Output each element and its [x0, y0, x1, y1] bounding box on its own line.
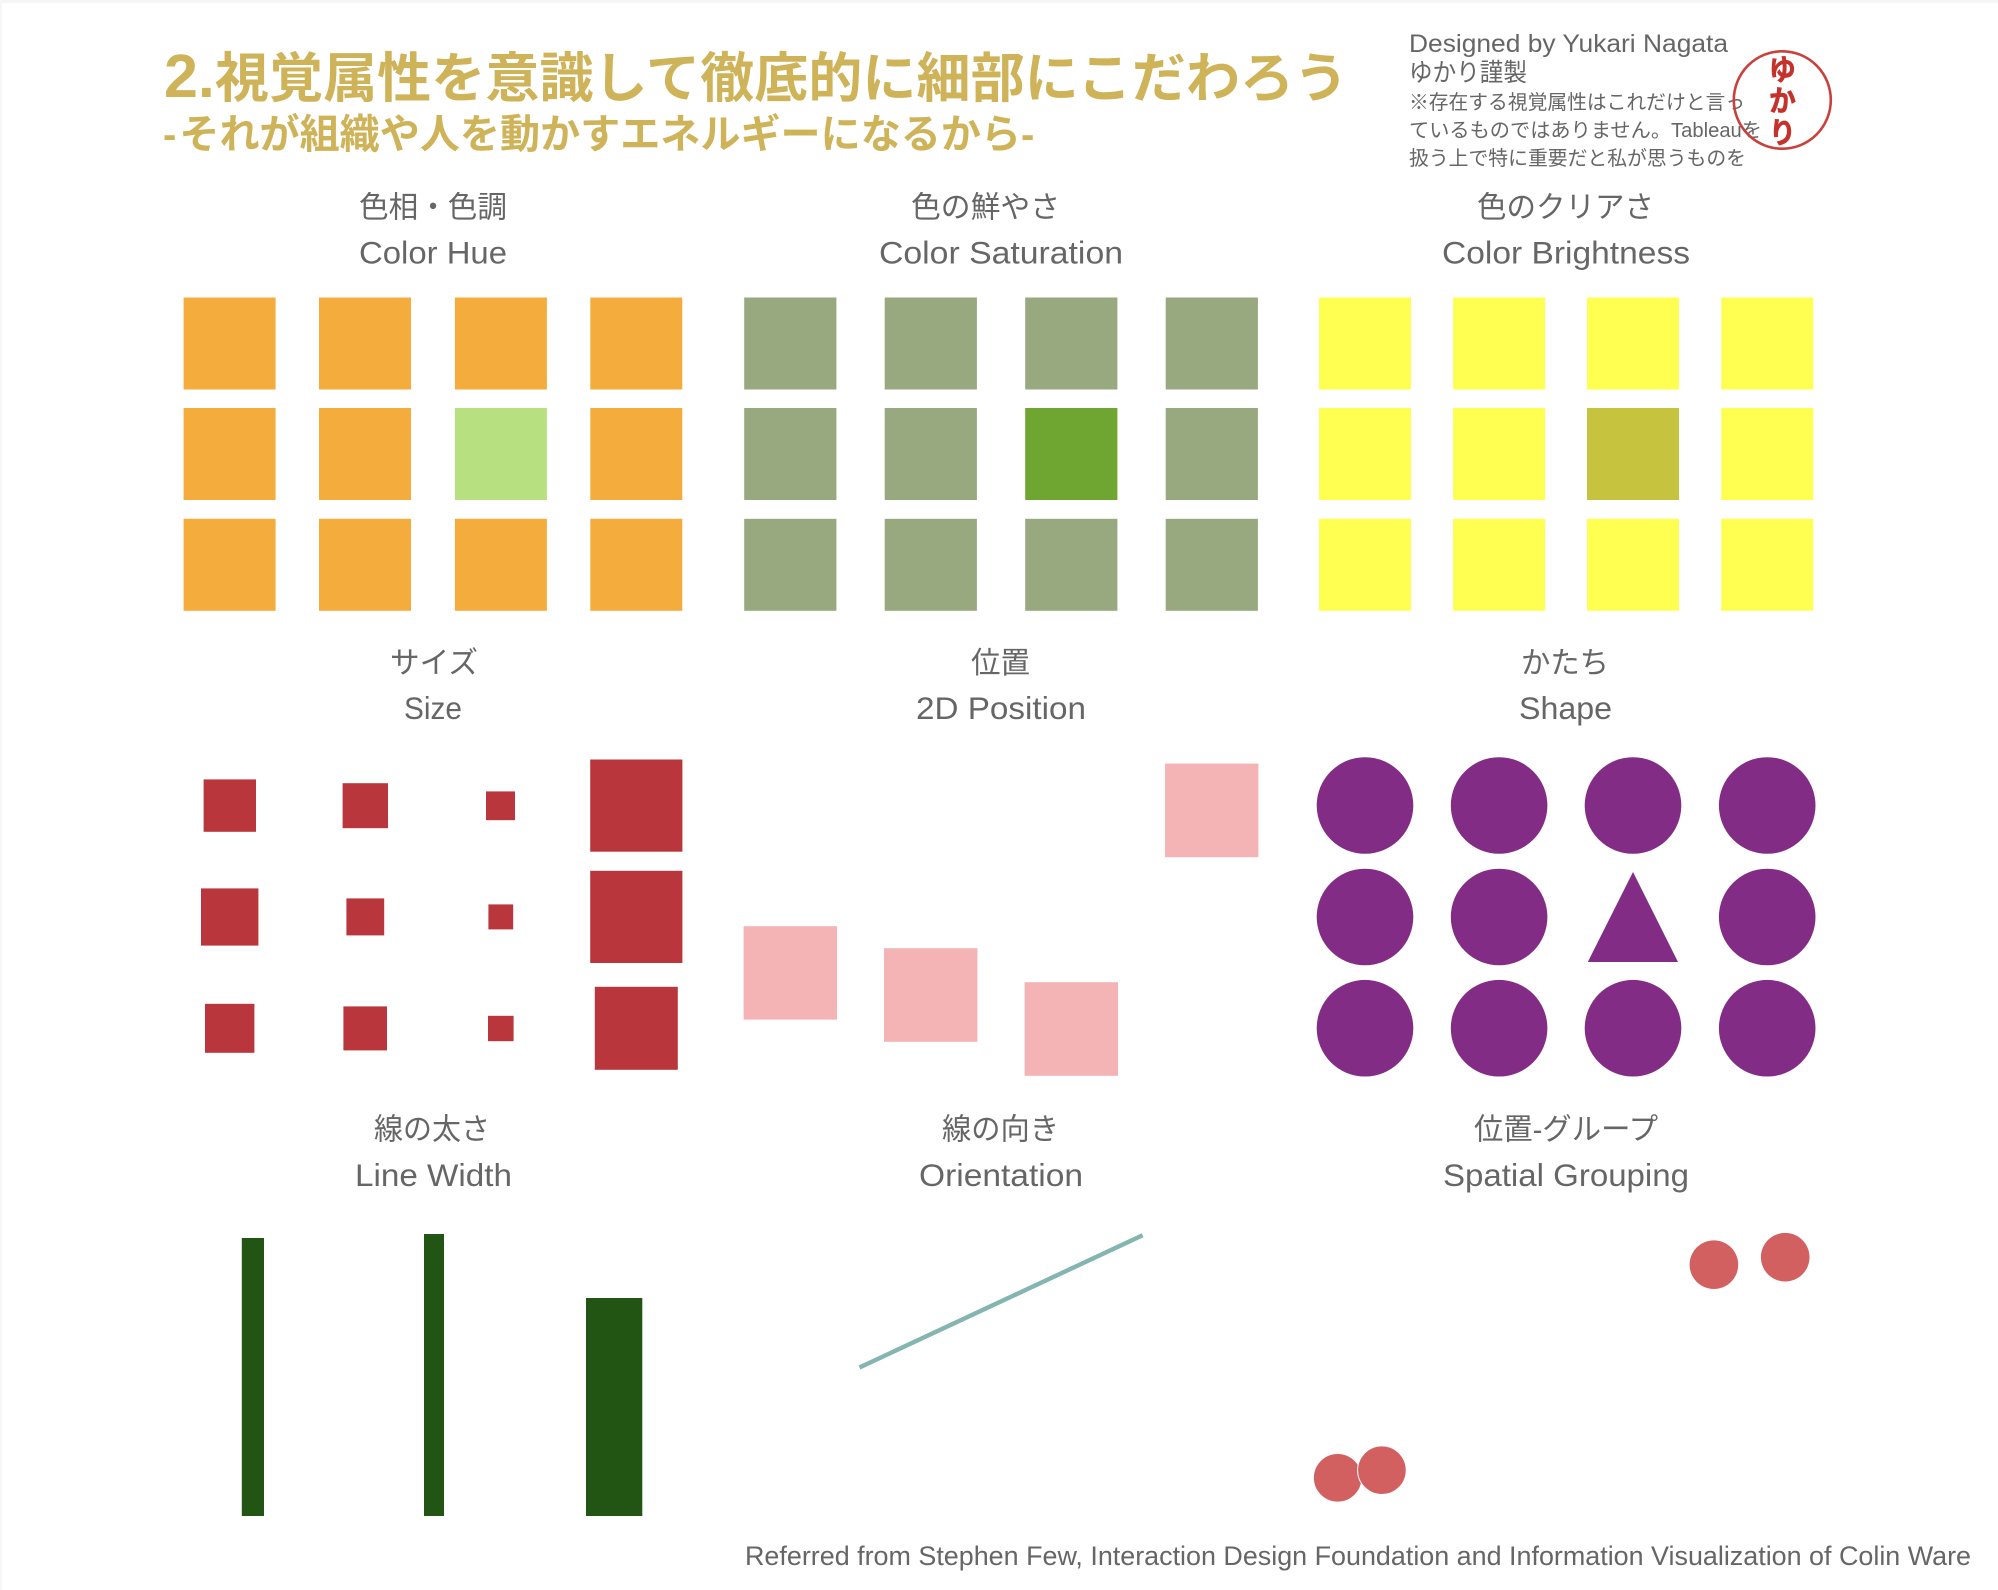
green bars of varying width [242, 1234, 642, 1516]
heading: shape: Shape [1519, 690, 1612, 726]
icon: red name seal: り [1769, 117, 1796, 149]
subtitle: -それが組織や人を動かすエネルギーになるから- [163, 113, 1034, 157]
heading: shape: かたち [1521, 647, 1609, 680]
heading: color brightness: Color Brightness [1442, 234, 1690, 270]
icon: red name seal: ゆ [1769, 54, 1796, 86]
square grid: one saturated square [744, 298, 1258, 611]
positioned pink squares [744, 764, 1258, 1076]
heading: line width [355, 1114, 512, 1193]
heading: color hue: 色相・色調 [359, 192, 507, 224]
red circles in two groups [1313, 1233, 1809, 1502]
heading: color hue [359, 192, 507, 270]
panel: spatial grouping [1313, 1114, 1809, 1502]
heading: 2D position [916, 647, 1086, 726]
panel: 2D position [744, 647, 1258, 1076]
heading: size [390, 647, 478, 726]
heading: 2D position: 位置 [971, 647, 1030, 680]
title: 2.視覚属性を意識して徹底的に細部にこだわろう [164, 42, 1348, 110]
heading: spatial grouping: Spatial Grouping [1443, 1157, 1689, 1193]
credit and note text block [1409, 30, 1762, 170]
angled teal line [860, 1235, 1143, 1368]
heading: spatial grouping: 位置-グループ [1474, 1114, 1658, 1146]
credit and note text block: ゆかり謹製 [1409, 59, 1527, 87]
panel: color hue [184, 192, 682, 611]
heading: orientation: Orientation [919, 1157, 1083, 1193]
heading: color hue: Color Hue [359, 234, 507, 270]
credit and note text block: ているものではありません。Tableauを [1409, 120, 1762, 142]
heading: color brightness [1442, 192, 1690, 270]
squares of varying size [201, 760, 682, 1070]
credit and note text block: ※存在する視覚属性はこれだけと言っ [1409, 91, 1745, 114]
heading: color saturation: 色の鮮やさ [911, 192, 1060, 224]
heading: spatial grouping [1443, 1114, 1689, 1193]
panel: shape [1317, 647, 1815, 1076]
heading: line width: 線の太さ [374, 1114, 490, 1146]
panel: orientation [860, 1114, 1143, 1368]
credit and note text block: Designed by Yukari Nagata [1409, 30, 1728, 58]
panel: color saturation [744, 192, 1258, 611]
panel: color brightness [1319, 192, 1813, 611]
square grid: one hue differs [184, 298, 682, 611]
heading: size: サイズ [390, 647, 478, 680]
panel: line width [242, 1114, 642, 1516]
circles with one triangle [1317, 757, 1815, 1076]
icon: red name seal [1734, 51, 1831, 149]
square grid: one darker square [1319, 298, 1813, 611]
heading: line width: Line Width [355, 1157, 512, 1193]
credit and note text block: 扱う上で特に重要だと私が思うものを [1409, 147, 1746, 170]
heading: color brightness: 色のクリアさ [1477, 192, 1654, 224]
heading: color saturation: Color Saturation [879, 234, 1123, 270]
icon: red name seal: か [1769, 85, 1796, 117]
heading: orientation [919, 1114, 1083, 1193]
heading: shape [1519, 647, 1612, 726]
heading: orientation: 線の向き [942, 1114, 1059, 1146]
heading: color saturation [879, 192, 1123, 270]
heading: size: Size [404, 690, 462, 726]
footer source credit: Referred from Stephen Few, Interaction Design Foundation and Information Visualization of Colin Ware [745, 1541, 1971, 1571]
panel: size [201, 647, 682, 1070]
heading: 2D position: 2D Position [916, 690, 1086, 726]
